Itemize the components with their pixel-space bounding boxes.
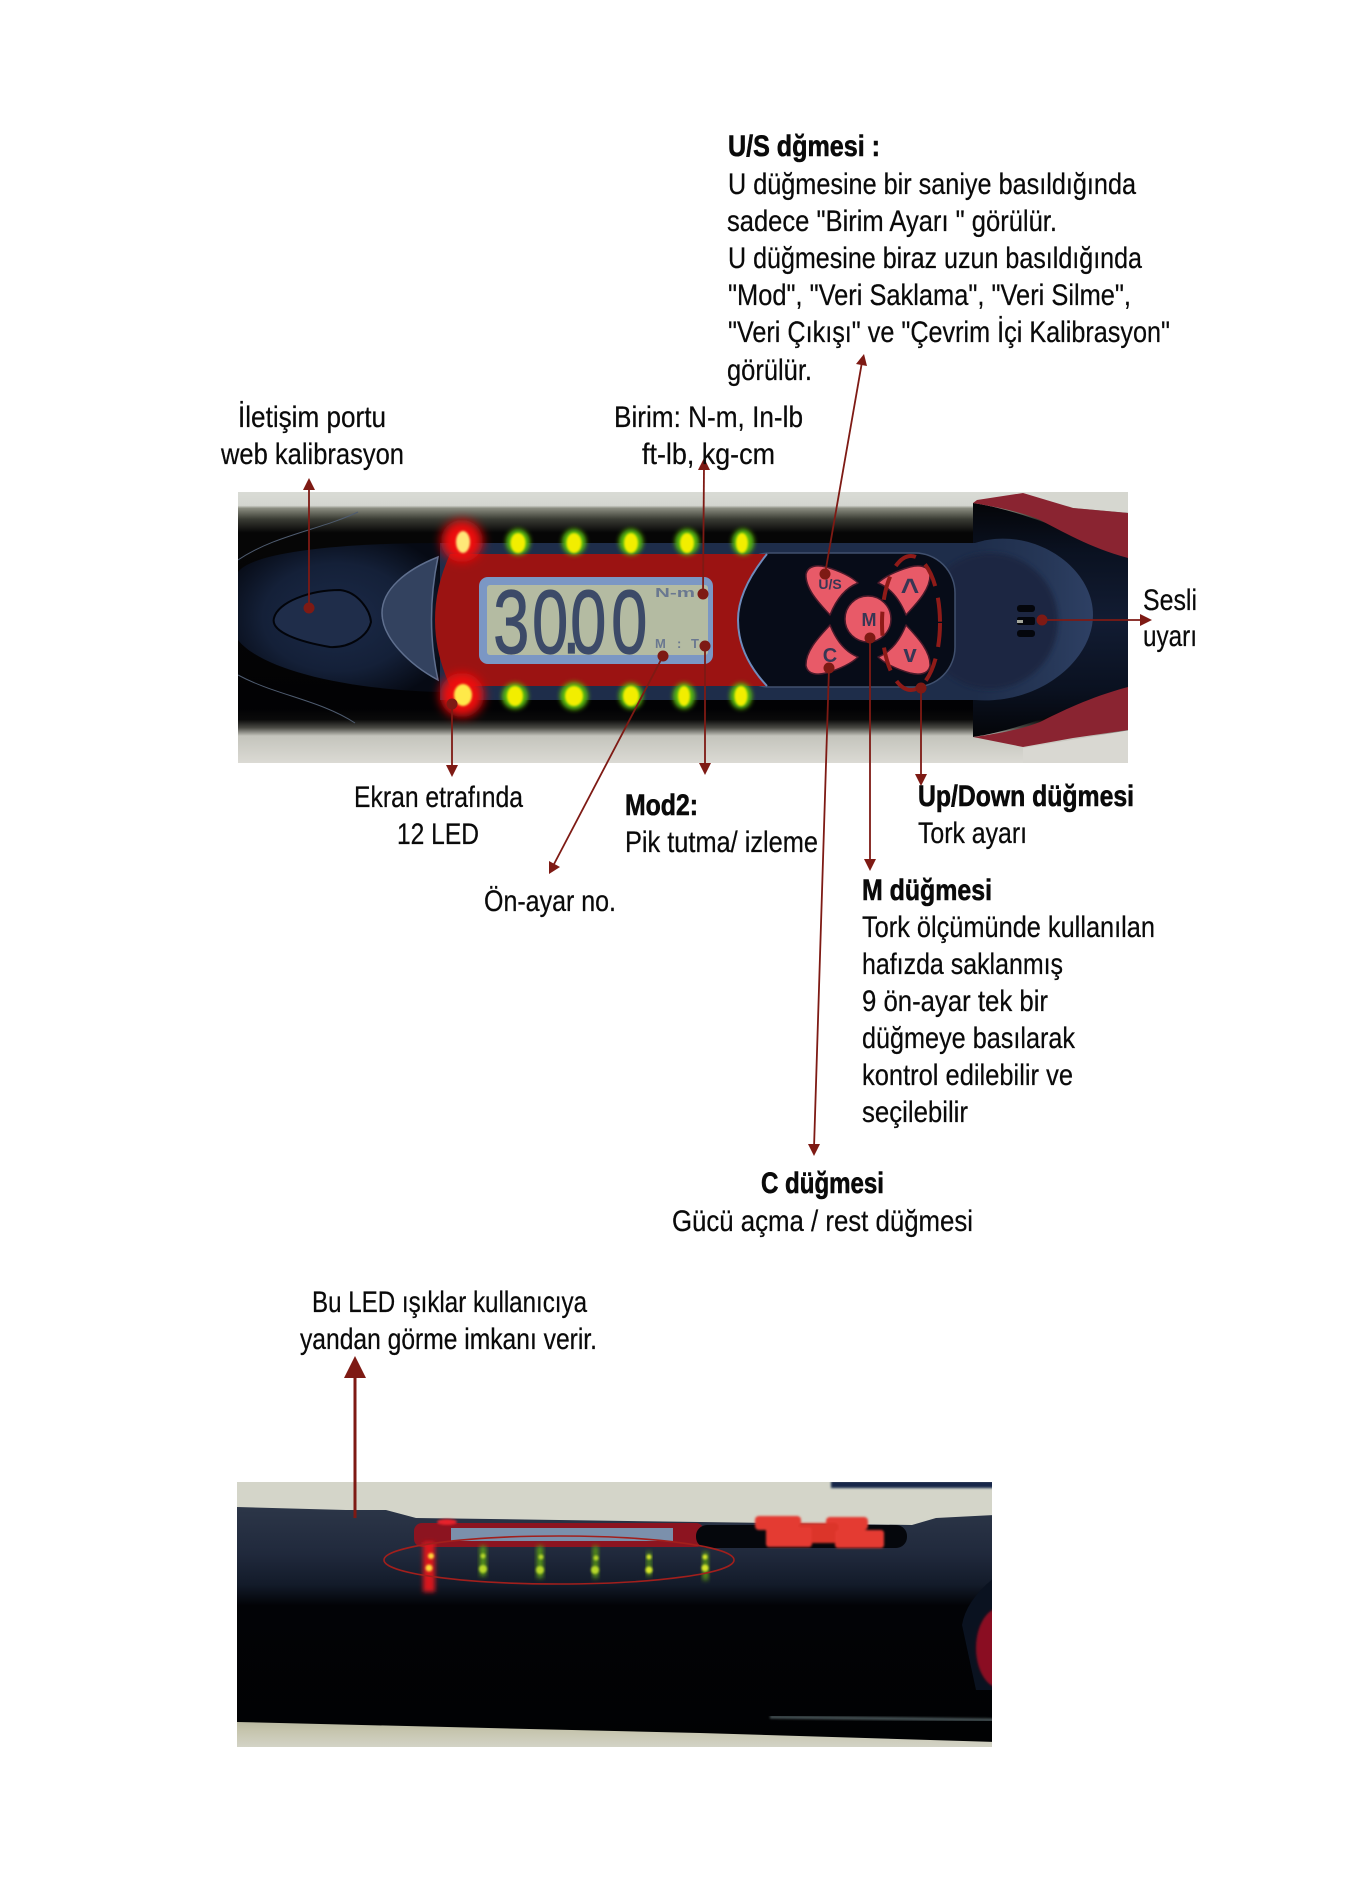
text: mode 2: [625, 789, 818, 859]
button: C: [806, 625, 858, 674]
photo: torque wrench top view: [238, 488, 1130, 766]
text: audible alarm: uyarı: [1143, 620, 1197, 653]
button: down: v: [903, 641, 917, 668]
text: M button: Tork ölçümünde kullanılan: [862, 911, 1155, 944]
text: U/S button: "Veri Çıkışı" ve "Çevrim İçi Kalibrasyon": [728, 316, 1170, 349]
text: communication port: web kalibrasyon: [220, 438, 404, 471]
side LED reflections: [423, 1542, 708, 1592]
text: U/S button: "Mod", "Veri Saklama", "Veri Silme",: [728, 279, 1131, 312]
text: mode 2: Mod2:: [625, 789, 698, 822]
text: unit: ft-lb, kg-cm: [642, 438, 775, 471]
button: up: [878, 566, 930, 615]
text: preset number: Ön-ayar no.: [484, 885, 616, 918]
handle right section: [949, 493, 1128, 752]
LCD display: [479, 577, 713, 664]
icon: speaker slots: [1017, 605, 1035, 637]
text: LED ring: [354, 781, 523, 851]
text: U/S button: U/S dğmesi :: [728, 130, 880, 163]
red buttons side view: [755, 1516, 884, 1548]
text: M button: düğmeye basılarak: [862, 1022, 1076, 1055]
button: U/S: U/S: [818, 576, 842, 592]
LCD display: T: [691, 636, 699, 651]
text: unit: Birim: N-m, In-lb: [614, 401, 803, 434]
arrow: up/down buttons: [915, 682, 927, 786]
text: U/S button: görülür.: [727, 354, 812, 387]
text: M button: [862, 874, 1155, 1129]
text: LED ring: Ekran etrafında: [354, 781, 523, 814]
button: U/S: [806, 566, 858, 615]
arrow: unit: [698, 458, 710, 600]
text: U/S button: sadece "Birim Ayarı " görülür.: [727, 205, 1057, 238]
text: communication port: İletişim portu: [238, 401, 386, 434]
text: M button: 9 ön-ayar tek bir: [862, 985, 1048, 1018]
arrow: U/S button: [820, 354, 867, 580]
text: U/S button: [727, 130, 1170, 387]
arrow: mode 2: [699, 640, 711, 775]
LCD display: M: [655, 636, 666, 651]
red panel and display: [414, 1519, 907, 1548]
text: communication port: [220, 401, 404, 471]
arrow: LED ring: [446, 698, 458, 777]
button: M: [845, 596, 891, 642]
red display panel: [435, 554, 767, 686]
highlight ellipse around LEDs: [384, 1536, 734, 1584]
text: audible alarm: [1143, 584, 1197, 653]
text: U/S button: U düğmesine bir saniye basıldığında: [728, 168, 1136, 201]
text: LED ring: 12 LED: [397, 818, 479, 851]
text: C button: Gücü açma / rest düğmesi: [672, 1205, 973, 1238]
button: up: ^: [901, 572, 919, 608]
LED row top: [441, 520, 754, 562]
button: C: C: [823, 645, 837, 667]
button: down: [878, 625, 930, 674]
arrow: side view LED: [344, 1356, 366, 1518]
arrow: M button: [864, 632, 876, 871]
navy centre band: [440, 543, 985, 700]
arrow: C button: [808, 662, 834, 1156]
text: up/down button: Tork ayarı: [918, 817, 1027, 850]
text: up/down button: Up/Down düğmesi: [918, 780, 1134, 813]
arrow: preset number: [549, 650, 668, 874]
text: side view LED note: Bu LED ışıklar kullanıcıya: [312, 1286, 587, 1319]
text: M button: M düğmesi: [862, 874, 992, 907]
button: M: M: [862, 610, 876, 630]
text: C button: [672, 1167, 973, 1238]
text: M button: kontrol edilebilir ve: [862, 1059, 1073, 1092]
text: side view LED note: [300, 1286, 597, 1356]
arrow: audible alarm: [1036, 614, 1152, 626]
text: mode 2: Pik tutma/ izleme: [625, 826, 818, 859]
LED row bottom: [440, 673, 752, 717]
text: M button: hafızda saklanmış: [862, 948, 1063, 981]
text: U/S button: U düğmesine biraz uzun basıldığında: [728, 242, 1142, 275]
icon: communication port: [274, 590, 371, 647]
handle left cap: [238, 512, 445, 723]
infographic canvas: [220, 134, 1196, 1747]
button panel: [730, 553, 955, 687]
text: up/down button: [918, 780, 1134, 850]
text: unit: [614, 401, 803, 471]
dashed highlight: up/down buttons: [882, 556, 940, 690]
text: M button: seçilebilir: [862, 1096, 968, 1129]
text: C button: C düğmesi: [761, 1167, 884, 1200]
arrow: port: [303, 478, 315, 614]
text: audible alarm: Sesli: [1143, 584, 1197, 617]
LCD display: N-m: [655, 585, 695, 600]
text: side view LED note: yandan görme imkanı verir.: [300, 1323, 597, 1356]
LCD display: 30.00: [493, 572, 647, 673]
LCD display: :: [677, 636, 681, 651]
photo: side view of wrench with LEDs: [237, 1481, 1024, 1747]
